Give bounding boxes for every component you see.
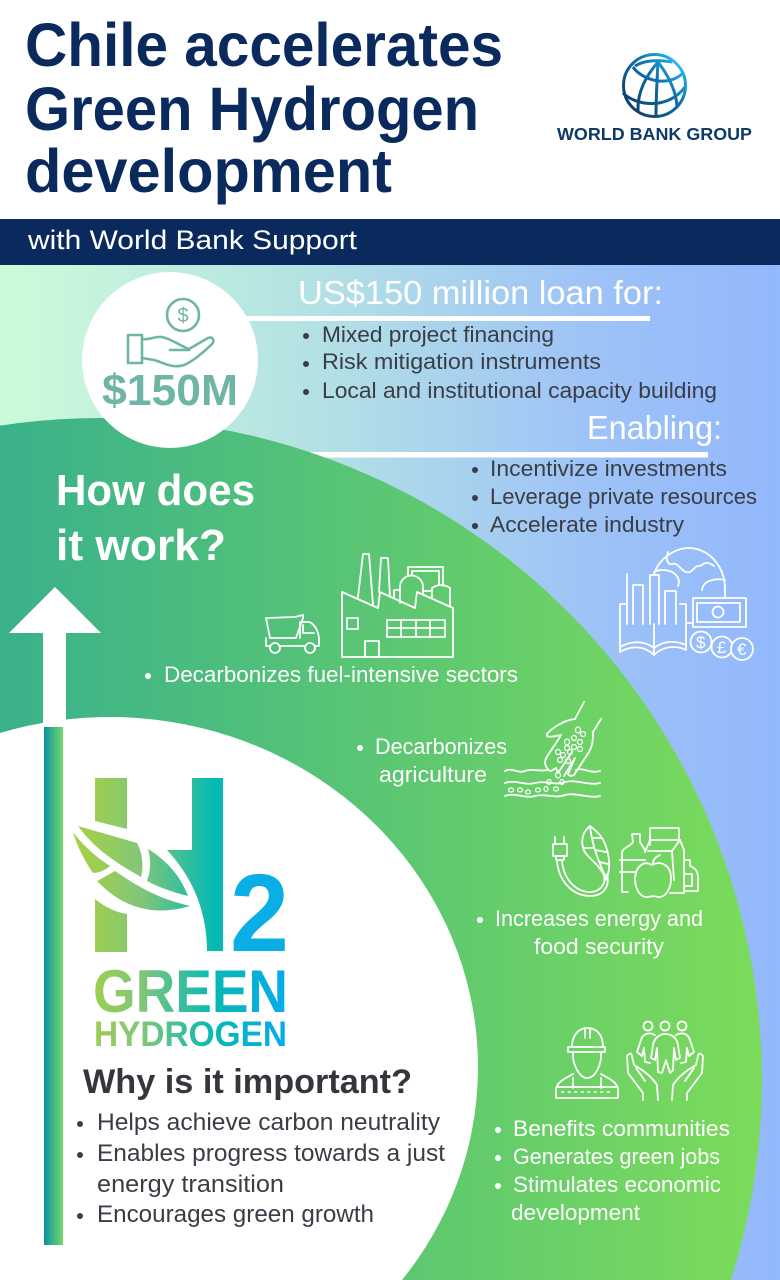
icon: currency symbols: $ — [696, 633, 706, 652]
title: development — [25, 137, 392, 205]
text: communities list: Generates green jobs — [513, 1144, 720, 1169]
globe — [623, 54, 686, 117]
logo: H2 green hydrogen — [73, 778, 289, 1054]
redraw of bullet over circle edge — [472, 523, 478, 529]
icon: currency symbols — [696, 633, 747, 659]
HYDROGEN: HYDROGEN — [94, 1015, 287, 1054]
leaf — [78, 826, 142, 877]
why important list: Encourages green growth — [97, 1201, 374, 1228]
enabling list: Accelerate industry — [490, 512, 684, 537]
text: communities list: development — [511, 1200, 640, 1225]
text: decarbonizes agriculture: Decarbonizes — [375, 734, 507, 759]
text: fuel-intensive sectors: Decarbonizes fuel-intensive sectors — [164, 662, 518, 687]
why important heading: Why is it important? — [83, 1063, 412, 1101]
title: Green Hydrogen — [25, 75, 479, 143]
text: communities list — [495, 1116, 730, 1225]
loan list: Local and institutional capacity building — [322, 378, 717, 403]
why important list: Enables progress towards a just — [97, 1140, 445, 1167]
subscript 2: 2 — [230, 852, 289, 975]
icon: currency symbols: € — [737, 640, 747, 659]
gradient background — [0, 265, 780, 1280]
icon: hands holding people — [627, 1022, 703, 1100]
loan heading: US$150 million loan for: — [298, 274, 663, 311]
text: decarbonizes agriculture: agriculture — [379, 762, 487, 787]
subtitle bar — [0, 219, 780, 265]
icon: planting hand and soil — [505, 702, 601, 797]
icon: finance globe and book — [620, 548, 753, 660]
icon: worker — [556, 1028, 618, 1098]
$150M badge — [82, 272, 258, 448]
loan list: Risk mitigation instruments — [322, 349, 601, 374]
logo: World Bank Group — [557, 54, 752, 144]
icon: factory — [342, 554, 453, 657]
header background — [0, 0, 780, 219]
loan list — [303, 322, 717, 403]
wordmark: WORLD BANK GROUP — [557, 124, 752, 144]
title — [25, 11, 503, 205]
section: enabling — [300, 409, 757, 537]
text: communities list: Stimulates economic — [513, 1172, 721, 1197]
title: Chile accelerates — [25, 11, 503, 79]
text: energy and food security: food security — [534, 934, 664, 959]
how does it work heading: How does — [56, 466, 255, 515]
how does it work heading — [56, 466, 255, 570]
text: communities list: Benefits communities — [513, 1116, 730, 1141]
subtitle bar: with World Bank Support — [27, 225, 358, 255]
icon: food products — [620, 828, 698, 897]
icon: hand with coin — [128, 299, 213, 366]
enabling list: Leverage private resources — [490, 484, 757, 509]
why important list: energy transition — [97, 1171, 284, 1198]
coin dollar: $ — [177, 305, 189, 327]
text: energy and food security — [477, 906, 703, 959]
enabling heading: Enabling: — [587, 409, 722, 446]
section: US$150 million loan — [240, 274, 717, 403]
loan list: Mixed project financing — [322, 322, 554, 347]
text: energy and food security: Increases energy and — [495, 906, 703, 931]
arrow — [9, 587, 101, 1245]
GREEN: GREEN — [93, 958, 288, 1025]
H letter shape — [73, 778, 223, 952]
why important list: Helps achieve carbon neutrality — [97, 1109, 440, 1136]
icon: truck — [266, 615, 319, 653]
icon: currency symbols: £ — [717, 638, 727, 657]
big green circle — [0, 418, 762, 1280]
amount: $150M — [102, 366, 238, 415]
white circle background for H2 — [0, 717, 478, 1280]
text: decarbonizes agriculture — [357, 734, 507, 787]
enabling list: Incentivize investments — [490, 456, 727, 481]
why important list — [77, 1109, 445, 1228]
icon: plug and leaf — [553, 826, 609, 896]
how does it work heading: it work? — [56, 521, 226, 570]
enabling list — [472, 456, 757, 537]
